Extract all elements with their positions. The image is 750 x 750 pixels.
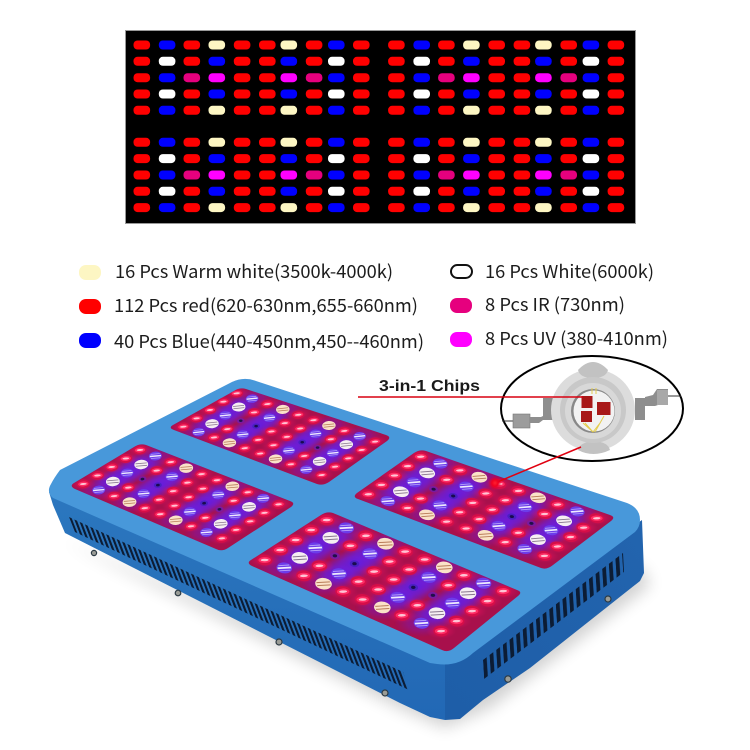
legend: warm white: 16 Pcs Warm white(3500k-4000k) xyxy=(115,258,393,284)
left side wall xyxy=(49,480,470,720)
legend: UV: 8 Pcs UV (380-410nm) xyxy=(485,325,668,351)
screws xyxy=(91,550,611,696)
callout: 3-in-1 chips xyxy=(358,356,683,490)
vents: long side xyxy=(69,517,409,690)
highlighted LED xyxy=(488,476,502,490)
top plate xyxy=(49,379,640,665)
callout label: 3-in-1 Chips xyxy=(379,378,480,395)
grow light fixture xyxy=(49,379,650,728)
LED panel: left xyxy=(72,444,294,550)
chip illustration xyxy=(502,362,681,454)
LED panel: right xyxy=(354,450,614,569)
legend: white: 16 Pcs White(6000k) xyxy=(485,258,654,284)
legend: red: 112 Pcs red(620-630nm,655-660nm) xyxy=(114,292,418,318)
legend: blue: 40 Pcs Blue(440-450nm,450--460nm) xyxy=(114,328,424,354)
right side wall xyxy=(445,520,644,720)
legend xyxy=(79,258,668,354)
magnifier ellipse xyxy=(501,356,683,461)
pointer to chip xyxy=(358,396,583,398)
shadow xyxy=(62,540,650,728)
pointer to LED xyxy=(495,447,581,483)
legend: IR: 8 Pcs IR (730nm) xyxy=(485,291,625,317)
LED panel: bottom xyxy=(248,512,520,652)
LED panel: top xyxy=(170,388,390,485)
LED layout diagram xyxy=(126,30,636,224)
vents: short side xyxy=(483,553,624,679)
